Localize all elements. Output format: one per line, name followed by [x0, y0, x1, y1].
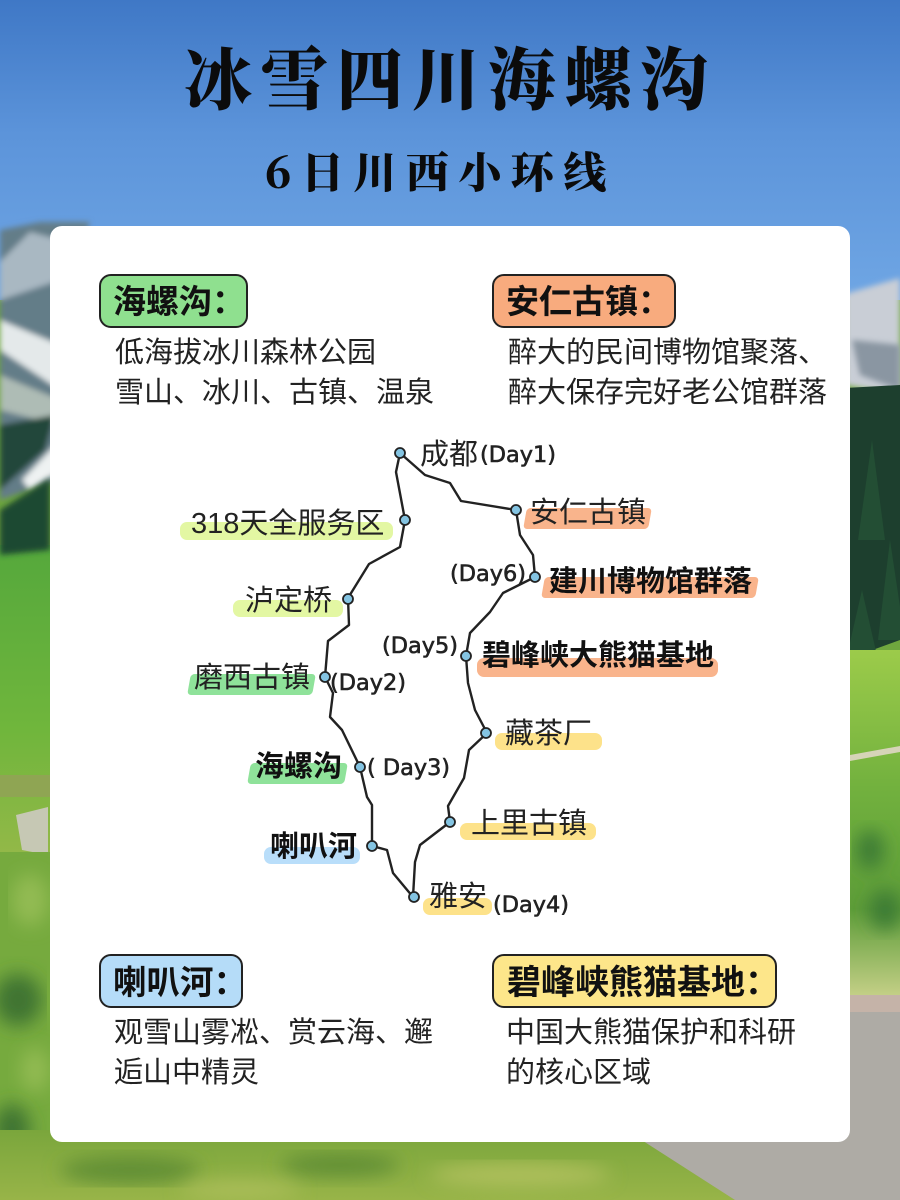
tag: Anren: 安仁古镇： [506, 275, 671, 323]
highlight: Jianchuan [541, 577, 759, 598]
label: Jianchuan: 建川博物馆群落 [549, 566, 752, 598]
text: Hailuogou description: 雪山、冰川、古镇、温泉 [115, 377, 434, 409]
bottom grass and road [0, 1130, 760, 1200]
text: Bifengxia description: 中国大熊猫保护和科研 [506, 1017, 796, 1049]
left lower grass [0, 852, 60, 1200]
text: Bifengxia description [506, 1017, 796, 1089]
highlight: Yaan [423, 898, 492, 915]
text: Bifengxia description: 的核心区域 [506, 1057, 651, 1089]
tag: Hailuogou: 海螺沟： [113, 275, 245, 323]
highlight: Anren [523, 508, 652, 529]
panel: Labahe [99, 954, 433, 1089]
left meadow [0, 545, 60, 855]
label: Day2: (Day2) [330, 670, 406, 696]
label: Moxi: 磨西古镇 [194, 662, 310, 694]
label: Day6: (Day6) [450, 561, 526, 587]
text: Anren description: 醉大的民间博物馆聚落、 [508, 337, 827, 369]
highlight: Bifengxia [477, 658, 718, 677]
panel: Anren [492, 274, 827, 409]
text: Hailuogou description: 低海拔冰川森林公园 [115, 337, 376, 369]
gravel and road [845, 995, 900, 1013]
title: 冰雪四川海螺沟 [184, 27, 716, 124]
highlight: Hailuogou [247, 763, 348, 784]
text: Labahe description: 观雪山雾凇、赏云海、邂 [114, 1017, 433, 1049]
label: Day4: (Day4) [493, 892, 569, 918]
label: Yaan: 雅安 [429, 881, 487, 913]
label: Shangli: 上里古镇 [471, 808, 587, 840]
main white panel [50, 226, 850, 1142]
highlight: Luding [233, 600, 343, 617]
label: Bifengxia: 碧峰峡大熊猫基地 [482, 640, 714, 672]
label: 318: 318天全服务区 [191, 508, 384, 540]
text: Labahe description: 逅山中精灵 [114, 1057, 259, 1089]
subtitle: 6日川西小环线 [265, 140, 616, 201]
text: Anren description [508, 337, 827, 409]
tag: Labahe: 喇叭河： [113, 955, 247, 1004]
highlight: Moxi [187, 674, 316, 695]
tag: Bifengxia: 碧峰峡熊猫基地： [507, 955, 779, 1004]
label: Day1: (Day1) [480, 442, 556, 468]
left mountain [0, 222, 90, 500]
right forest [845, 385, 900, 660]
text: Anren description: 醉大保存完好老公馆群落 [508, 377, 827, 409]
label: Chengdu: 成都 [420, 439, 478, 471]
highlight: Shangli [460, 823, 596, 840]
right mountain [845, 278, 900, 395]
text: Hailuogou description [115, 337, 434, 409]
label: Hailuogou: 海螺沟 [255, 751, 342, 783]
text: Labahe description [114, 1017, 433, 1089]
panel: Bifengxia [492, 954, 796, 1089]
label: Day5: (Day5) [382, 633, 458, 659]
label: Zangcha: 藏茶厂 [505, 718, 592, 750]
label: Anren: 安仁古镇 [530, 497, 646, 529]
panel: Hailuogou [99, 274, 434, 409]
highlight: 318 [180, 522, 393, 540]
highlight: Laba [264, 847, 360, 864]
label: Luding: 泸定桥 [245, 585, 332, 617]
highlight: Zangcha [495, 733, 602, 750]
label: Day3: ( Day3) [367, 755, 450, 781]
label: Laba: 喇叭河 [270, 831, 357, 863]
right meadow [845, 650, 900, 995]
